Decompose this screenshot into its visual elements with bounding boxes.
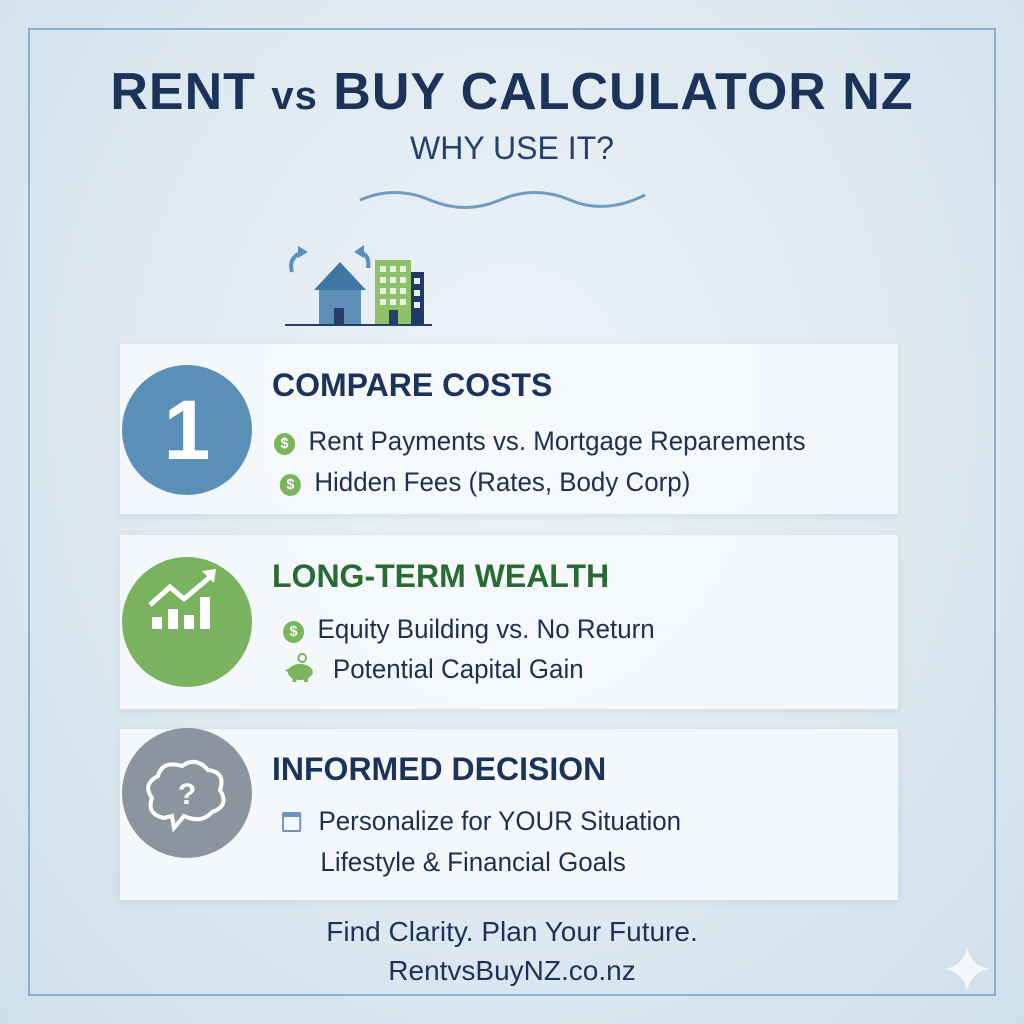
panel: informed decision <box>120 729 898 900</box>
bullets: compare costs: $ <box>286 476 294 493</box>
icon: sparkle <box>944 946 990 992</box>
heading: long-term wealth: LONG-TERM WEALTH <box>272 558 609 594</box>
bullets: compare costs <box>274 426 806 497</box>
icon: question cloud circle: ? <box>178 778 196 811</box>
bullets: informed decision: Personalize for YOUR Situation <box>318 806 681 836</box>
icon: question cloud circle <box>122 728 252 858</box>
bullets: compare costs: Rent Payments vs. Mortgage Reparements <box>309 426 806 456</box>
bullets: compare costs: $ <box>281 435 289 452</box>
bullets: long-term wealth <box>283 614 655 684</box>
heading: compare costs: COMPARE COSTS <box>272 367 552 403</box>
heading: informed decision: INFORMED DECISION <box>272 751 606 787</box>
footer text <box>326 916 698 986</box>
icon: growth chart circle <box>122 557 252 687</box>
icon: house and building <box>285 245 432 326</box>
bullets: long-term wealth: Potential Capital Gain <box>333 654 584 684</box>
bullets: compare costs: Hidden Fees (Rates, Body Corp) <box>314 467 690 497</box>
bullets: long-term wealth: Equity Building vs. No Return <box>318 614 655 644</box>
bullets: long-term wealth: $ <box>290 623 298 640</box>
bullets: informed decision <box>282 806 681 877</box>
icon: number 1 circle <box>122 365 252 495</box>
panel: compare costs <box>120 344 898 514</box>
panel: long-term wealth <box>120 535 898 709</box>
title: RENT vs BUY CALCULATOR NZ <box>110 63 914 121</box>
icon: number 1 circle: 1 <box>164 383 210 477</box>
footer text: Find Clarity. Plan Your Future. <box>326 916 698 947</box>
footer text: RentvsBuyNZ.co.nz <box>388 955 636 986</box>
bullets: informed decision: Lifestyle & Financial Goals <box>320 847 626 877</box>
wave <box>360 191 646 209</box>
subtitle: WHY USE IT? <box>410 130 614 166</box>
